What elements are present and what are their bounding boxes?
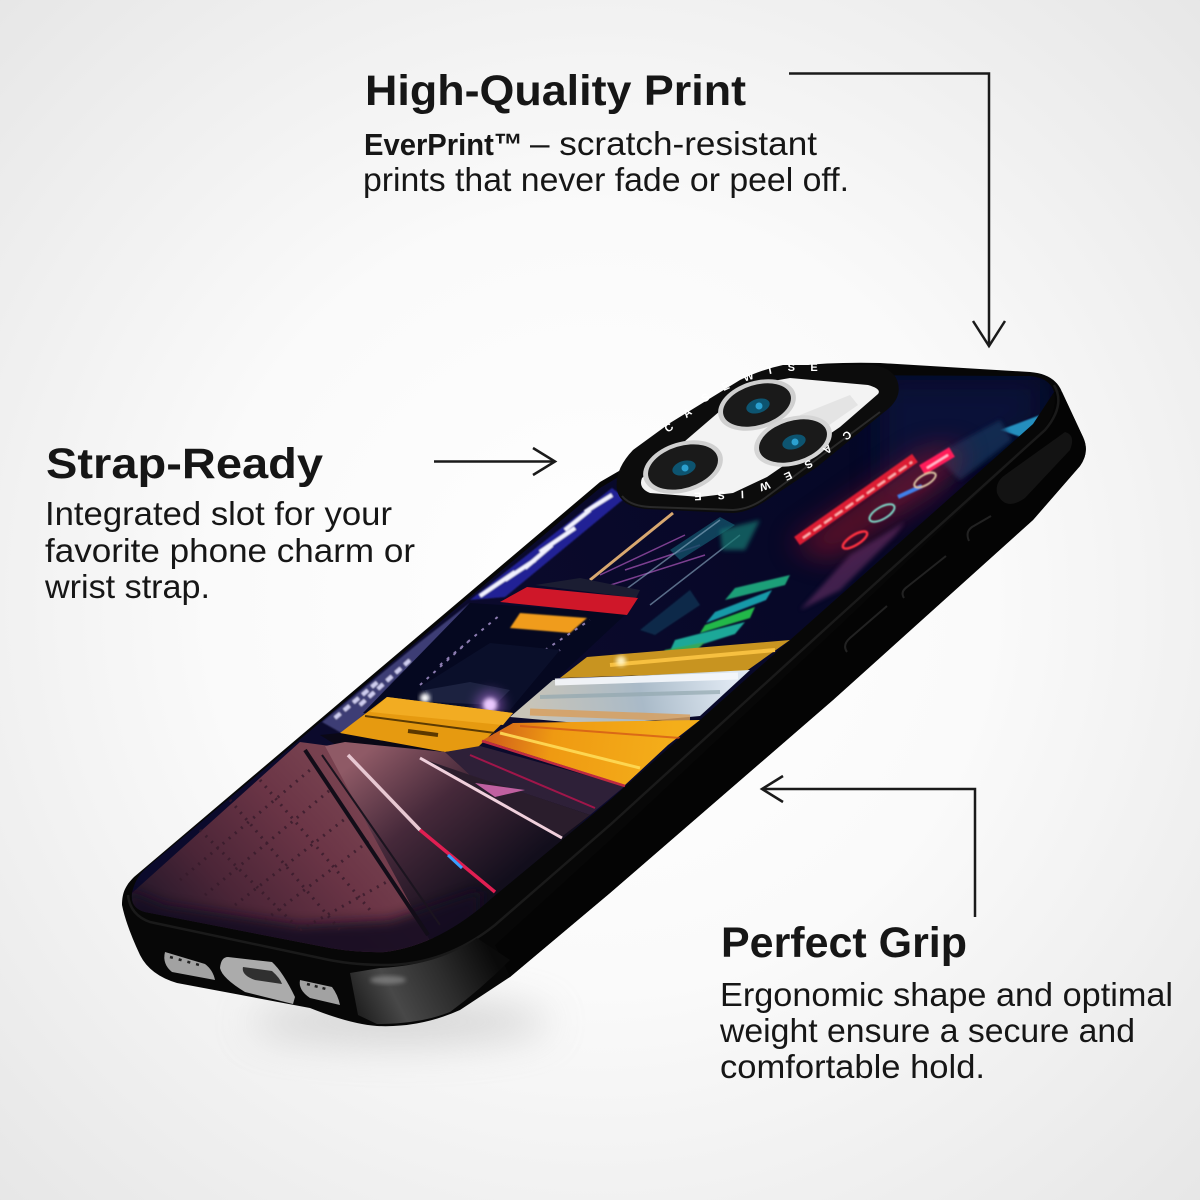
neon sign (797, 452, 952, 552)
arrow to case surface (789, 74, 1005, 346)
brick texture (180, 770, 390, 930)
ring brand text: top: CASEWISE (665, 364, 818, 432)
heading: High-Quality Print (365, 67, 746, 115)
cyan lights, upper right (1001, 414, 1039, 437)
road (325, 742, 590, 950)
tram rail: white line (420, 758, 562, 838)
left speaker grille (164, 952, 215, 980)
side wall shading (495, 392, 1086, 977)
body text: Integrated slot for your (45, 495, 392, 532)
body text: – scratch-resistant (530, 125, 817, 162)
camera glass plate (641, 378, 879, 497)
body text: favorite phone charm or (45, 532, 415, 569)
phone drop shadow (250, 1000, 550, 1044)
side buttons (845, 516, 991, 652)
tram body lights (420, 615, 590, 690)
pink shop front (800, 522, 905, 610)
headlights (420, 693, 430, 703)
blue window lights, upper left (470, 488, 625, 600)
tram windscreen (420, 643, 560, 710)
white light trail (510, 670, 750, 725)
body text: comfortable hold. (720, 1048, 985, 1085)
green and teal building windows (640, 575, 790, 658)
ring brand text: bottom: CASEWISE (694, 432, 851, 500)
heading: Perfect Grip (721, 919, 967, 967)
body text: EverPrint™ (364, 127, 523, 162)
tram dark body (363, 603, 627, 713)
heading: Strap-Ready (46, 440, 323, 488)
body text (44, 495, 415, 605)
lower left building lights (322, 603, 470, 735)
tan tram pole (590, 513, 673, 580)
brick pavement (132, 742, 440, 960)
side switch (997, 432, 1072, 504)
body text: weight ensure a secure and (719, 1012, 1135, 1049)
red edge of trail (482, 741, 625, 786)
red destination panel (500, 587, 638, 615)
body text (363, 125, 849, 198)
raised bezel rim (128, 385, 1058, 965)
callout: perfect grip (719, 776, 1173, 1085)
yellow tram front (340, 697, 513, 752)
arrow to strap slot (434, 448, 555, 475)
phone with case (122, 362, 1086, 1026)
glass shading (800, 395, 858, 437)
amber sign (510, 613, 587, 633)
arrow to side grip (762, 776, 975, 917)
lens left (636, 431, 730, 503)
yellow light trail (483, 720, 700, 785)
body text: wrist strap. (44, 568, 210, 605)
charging port (220, 957, 295, 1004)
ring lower lip highlight (622, 412, 880, 510)
callout: strap-ready (44, 440, 555, 605)
top yellow light trail (560, 640, 790, 678)
screen artwork: night city street (132, 376, 1054, 952)
sky and buildings (132, 376, 1054, 902)
tram roof (535, 578, 640, 598)
road surface right of tram (445, 746, 625, 815)
tram shadow (320, 733, 447, 752)
lens right (748, 406, 838, 476)
bottom corner gloss (350, 938, 510, 1024)
tram rail: pink reflection (348, 755, 420, 830)
camera bump ring (616, 364, 899, 513)
body text: prints that never fade or peel off. (363, 161, 849, 198)
far building glow (880, 380, 1038, 490)
case body silhouette (122, 363, 1086, 1026)
stone gutter (305, 750, 428, 935)
right speaker grille (300, 980, 340, 1005)
body text (719, 976, 1173, 1085)
overhead wires and glass building (600, 534, 706, 585)
bottom edge darkening (132, 890, 461, 952)
lens top (712, 370, 802, 440)
dark road strip (420, 758, 590, 838)
body text: Ergonomic shape and optimal (720, 976, 1173, 1013)
callout: high-quality print (363, 67, 1005, 346)
red neon glow (790, 448, 965, 560)
